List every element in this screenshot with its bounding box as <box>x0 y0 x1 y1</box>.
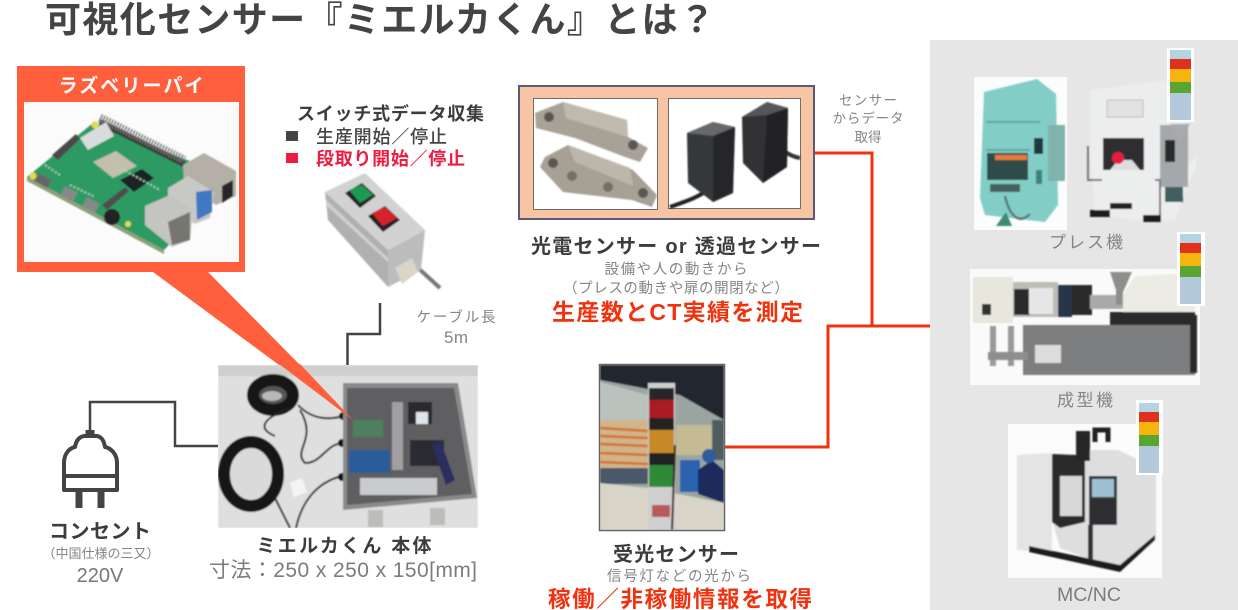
text block: outlet <box>42 521 160 587</box>
heading: raspberry pi: ラズベリーパイ <box>58 74 204 97</box>
text block: light-receiving sensor: 受光センサー <box>613 543 739 566</box>
label: press: プレス機 <box>1049 233 1123 252</box>
note: data acquisition from sensors: からデータ <box>832 110 904 126</box>
machine: press 2 <box>1088 80 1196 222</box>
connection lines: power and switch cables <box>90 303 380 446</box>
label: MC/NC: MC/NC <box>1057 584 1121 606</box>
connection lines: sensors to machines <box>725 153 930 447</box>
icon: power plug <box>64 430 117 508</box>
photo: photoelectric sensor <box>668 98 800 208</box>
text block: switch data collection <box>286 103 484 169</box>
text block: main unit: 寸法：250 x 250 x 150[mm] <box>209 559 477 582</box>
photo frame <box>600 364 724 530</box>
photo: signal tower in factory <box>600 365 724 530</box>
panel: sensor photos <box>519 86 814 219</box>
text block: outlet: コンセント <box>49 521 151 543</box>
text block: photoelectric or transmission sensor: 生産数とCT実績を測定 <box>552 299 803 325</box>
machine: injection molding <box>970 269 1200 385</box>
machine: MC/NC <box>1008 424 1162 578</box>
text block: outlet: （中国仕様の三又） <box>42 546 160 561</box>
icon: switch box with green and red buttons <box>325 173 440 288</box>
note: cable length <box>416 308 496 347</box>
text block: light-receiving sensor: 信号灯などの光から <box>607 568 751 585</box>
text block: main unit <box>209 535 477 582</box>
text block: switch data collection: スイッチ式データ収集 <box>297 103 484 124</box>
panel: machines background <box>930 40 1238 610</box>
icon: signal tower on MC/NC <box>1136 400 1163 475</box>
photo: raspberry pi board <box>27 118 236 254</box>
title: 可視化センサー『ミエルカくん』とは？ <box>45 0 715 40</box>
icon: signal tower on molding machine <box>1177 232 1205 306</box>
panel: raspberry pi callout <box>17 66 300 365</box>
text block: photoelectric or transmission sensor: 光電センサー or 透過センサー <box>531 235 821 258</box>
photo: transmission sensor <box>534 98 658 210</box>
note: cable length: ケーブル長 <box>416 308 496 326</box>
text block: switch data collection: 生産開始／停止 <box>316 127 447 147</box>
text block: main unit: ミエルカくん 本体 <box>256 535 432 557</box>
pointer to the main unit <box>153 272 300 365</box>
label: molding machine: 成型機 <box>1057 391 1113 410</box>
note: data acquisition from sensors: 取得 <box>854 129 882 145</box>
machine: press 1 <box>974 77 1067 230</box>
pointer tip over main unit <box>279 364 353 420</box>
text block: photoelectric or transmission sensor: （プレスの動きや扉の開閉など） <box>563 280 789 297</box>
note: data acquisition from sensors: センサー <box>839 93 897 108</box>
photo: main unit <box>218 365 478 528</box>
text block: outlet: 220V <box>77 565 124 587</box>
text block: light-receiving sensor <box>548 543 812 610</box>
text block: switch data collection: 段取り開始／停止 <box>316 149 465 169</box>
icon: signal tower on press <box>1167 48 1194 122</box>
text block: photoelectric or transmission sensor <box>531 235 821 325</box>
note: cable length: 5m <box>444 328 468 347</box>
text block: photoelectric or transmission sensor: 設備や人の動きから <box>604 261 748 278</box>
note: data acquisition from sensors <box>832 93 904 145</box>
